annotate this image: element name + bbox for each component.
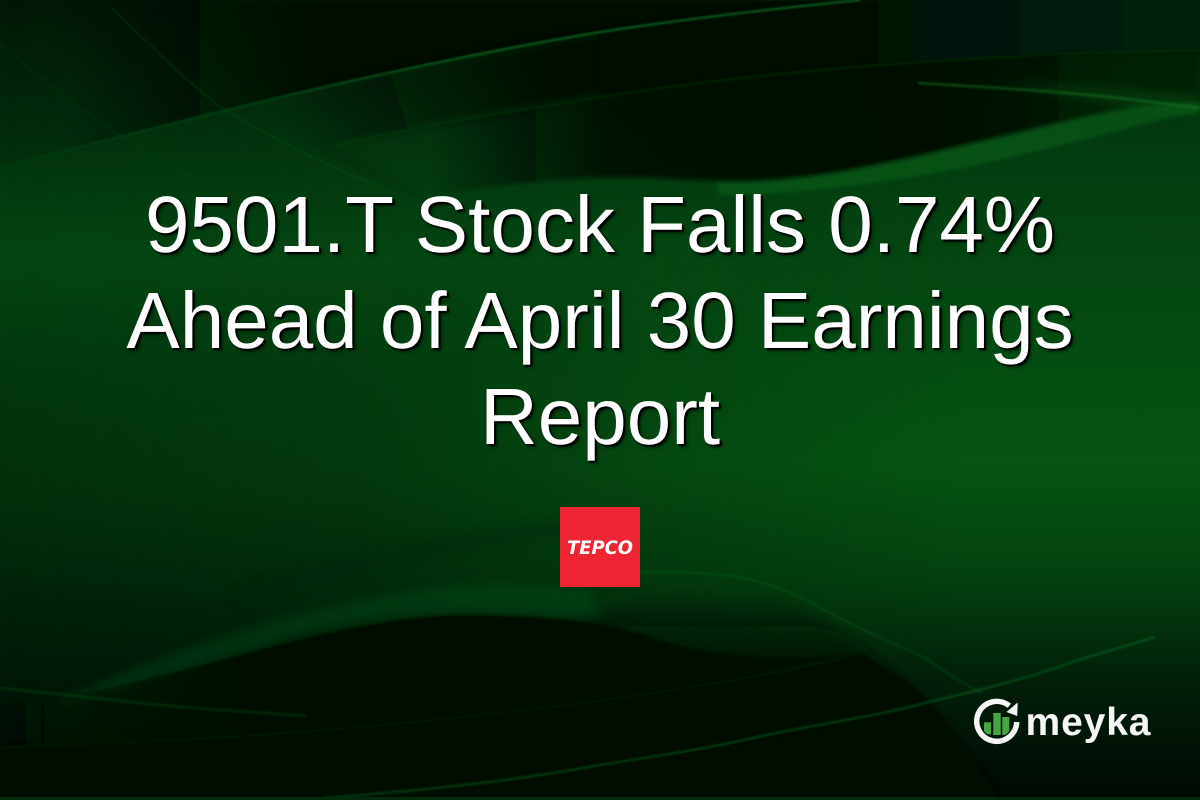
lower dark lens <box>0 615 860 747</box>
logo: TEPCO: TEPCO <box>567 537 633 559</box>
title: 9501.T Stock Falls 0.74% <box>145 180 1055 269</box>
band between first and second curves <box>222 0 1200 205</box>
wordmark: meyka <box>1026 701 1151 744</box>
top inner dark lens <box>330 51 1200 195</box>
top dark sweep above first curve <box>0 0 860 168</box>
logo: TEPCO <box>560 507 640 587</box>
title: Report <box>480 372 720 461</box>
title: Ahead of April 30 Earnings <box>126 276 1074 365</box>
title <box>126 180 1075 465</box>
bottom dark band <box>0 653 929 800</box>
dark sweep under lower right curve <box>0 586 1000 800</box>
glow band below lens <box>715 102 1200 195</box>
dark streak above ribbon <box>230 518 600 605</box>
icon: ring with arrow and bars <box>977 701 1018 741</box>
logo: meyka <box>974 698 1151 744</box>
ribbon glow lower left <box>60 584 600 705</box>
